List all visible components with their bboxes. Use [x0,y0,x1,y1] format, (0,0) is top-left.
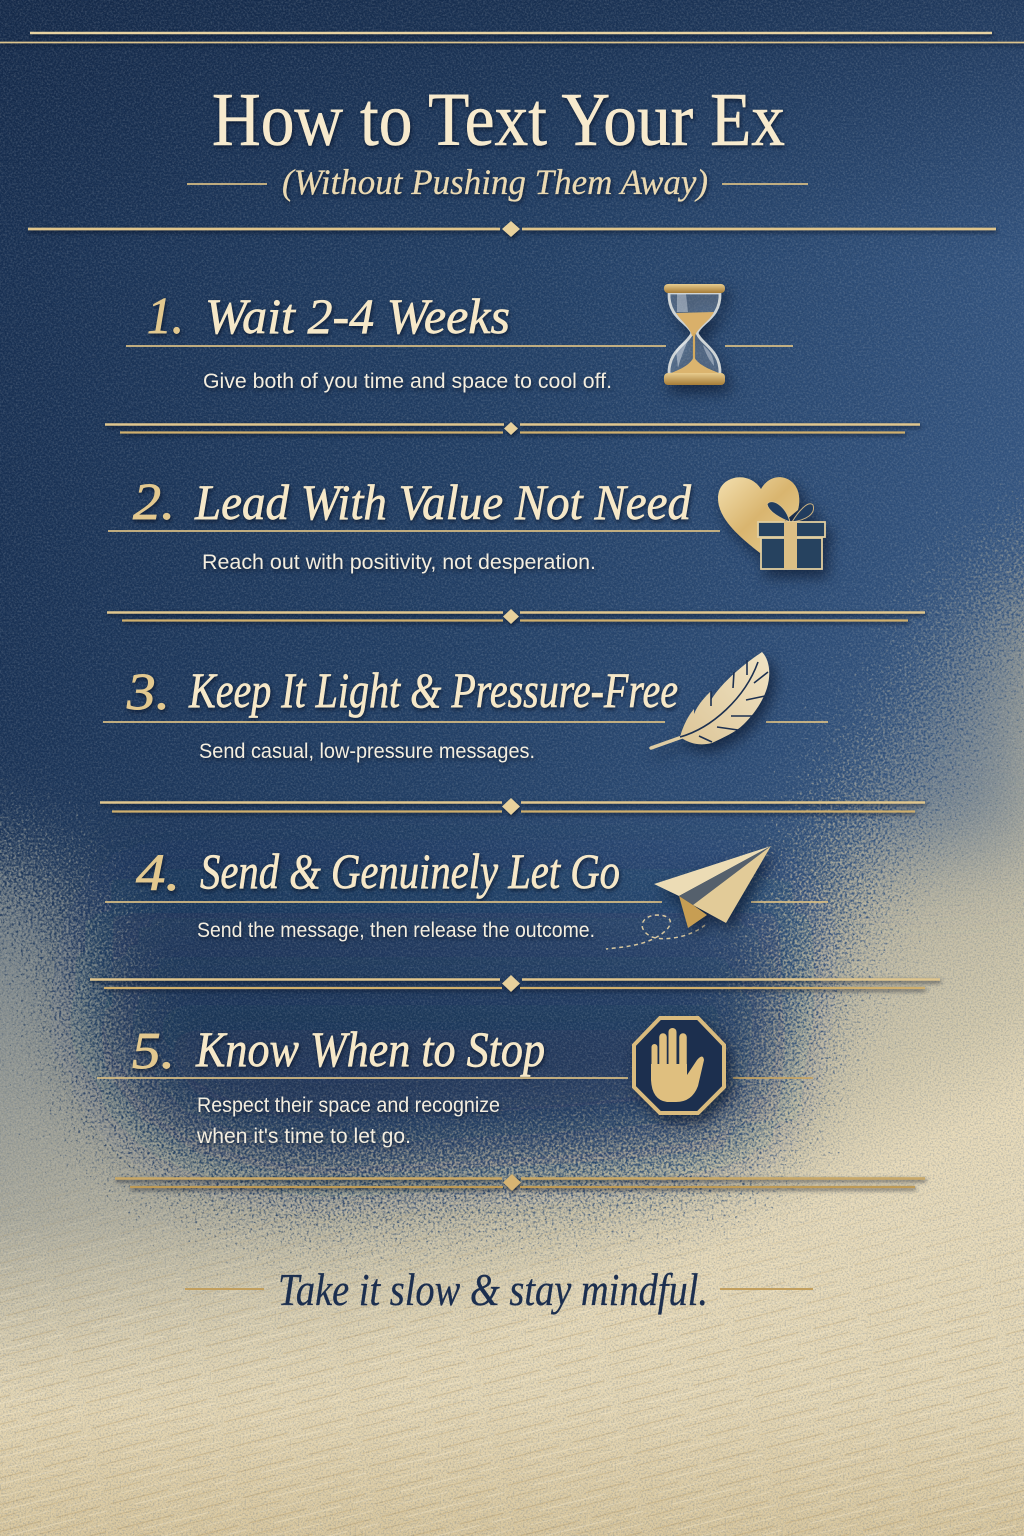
icon: hourglass [664,284,725,385]
step 5 heading: Know When to Stop [195,1021,545,1077]
step 2 [108,474,825,574]
step 4 description: Send the message, then release the outcome. [197,918,595,942]
step 4 [105,843,828,949]
step 2 description: Reach out with positivity, not desperation. [202,550,596,574]
step 3 rule [103,721,828,723]
step 3 number: 3. [126,664,170,721]
step 3 heading: Keep It Light & Pressure-Free [188,662,678,718]
icon: paper plane with dashed trail [606,846,771,949]
icon: feather [651,652,769,748]
step 4 heading: Send & Genuinely Let Go [200,843,620,899]
step 3 [103,652,828,763]
step 4 rule [105,901,828,903]
title: How to Text Your Ex [212,78,785,162]
step 5 description: Respect their space and recognize [197,1093,500,1117]
step 2 rule [108,530,720,532]
divider 2 [107,609,925,624]
step 3 description: Send casual, low-pressure messages. [199,739,535,763]
header divider [28,221,996,237]
step 5 number: 5. [132,1023,175,1080]
step 5 description: when it's time to let go. [196,1124,411,1148]
step 5 description [196,1093,500,1148]
step 1 number: 1. [147,288,184,345]
step 1 description: Give both of you time and space to cool off. [203,369,612,393]
step 1 [126,284,793,393]
step 1 heading: Wait 2-4 Weeks [205,288,510,344]
icon: heart and gift [718,477,825,569]
step 2 heading: Lead With Value Not Need [194,474,692,530]
top double rule [0,33,1024,42]
icon: stop hand in octagon [634,1018,724,1113]
divider 5 [115,1174,925,1191]
subtitle with side rules: (Without Pushing Them Away) [282,162,708,202]
step 5 [97,1018,813,1148]
step 4 number: 4. [136,845,180,902]
divider 4 [90,975,940,992]
step 5 rule [97,1077,813,1079]
step 2 number: 2. [133,474,175,531]
divider 3 [100,798,925,815]
closing line: Take it slow & stay mindful. [278,1264,708,1315]
step 1 rule [126,345,793,347]
divider 1 [105,422,920,435]
